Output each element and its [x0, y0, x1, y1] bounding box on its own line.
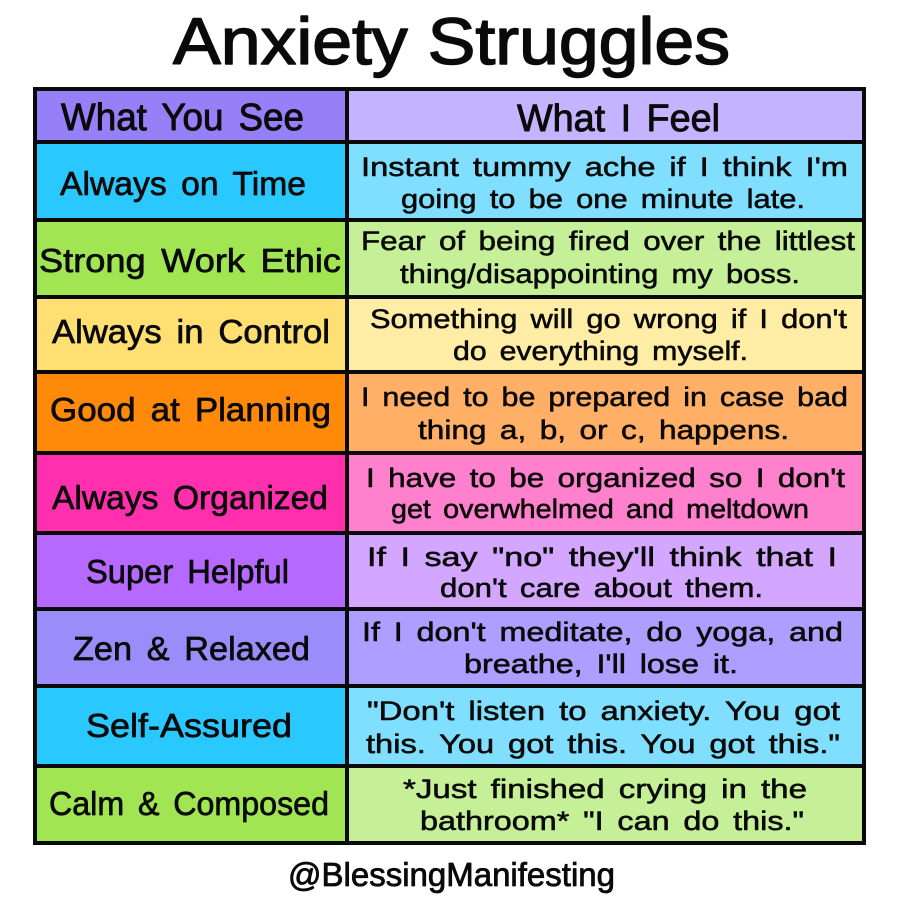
row: good at planning: thing a, b, or c, happens. — [418, 415, 789, 445]
row: always organized — [37, 455, 862, 531]
row: always in control: do everything myself. — [453, 336, 748, 366]
row: strong work ethic — [37, 222, 862, 295]
row: always on time: going to be one minute late. — [401, 184, 805, 214]
row: self-assured: this. You got this. You got this." — [366, 729, 840, 759]
row: always on time: Instant tummy ache if I think I'm — [361, 152, 848, 182]
row: calm and composed: *Just finished crying in the — [403, 774, 807, 804]
row: always in control: Always in Control — [52, 313, 330, 350]
row: calm and composed: bathroom* "I can do this." — [420, 806, 804, 836]
footer handle: @BlessingManifesting — [288, 856, 615, 893]
row: zen and relaxed: breathe, I'll lose it. — [464, 649, 738, 679]
row: always organized: get overwhelmed and meltdown — [391, 494, 809, 524]
row: super helpful — [37, 535, 862, 607]
row: self-assured: Self-Assured — [86, 707, 292, 744]
title: Anxiety Struggles — [173, 4, 730, 78]
row: always on time — [37, 144, 862, 218]
row: strong work ethic: Strong Work Ethic — [39, 242, 341, 279]
row: always on time: Always on Time — [60, 165, 306, 202]
row: calm and composed: Calm & Composed — [49, 785, 329, 822]
table — [33, 87, 866, 845]
row: self-assured — [37, 688, 862, 764]
row: super helpful: don't care about them. — [440, 573, 763, 603]
row: super helpful: If I say "no" they'll think that I — [367, 542, 837, 572]
row: always organized: Always Organized — [52, 479, 328, 516]
row: zen and relaxed — [37, 611, 862, 684]
row: zen and relaxed: Zen & Relaxed — [73, 630, 310, 667]
row: self-assured: "Don't listen to anxiety. You got — [367, 696, 841, 726]
row: always in control — [37, 299, 862, 370]
row: header: What I Feel — [517, 98, 720, 140]
row: good at planning — [37, 374, 862, 451]
row: strong work ethic: thing/disappointing my boss. — [400, 259, 800, 289]
row: zen and relaxed: If I don't meditate, do yoga, and — [362, 617, 843, 647]
row: super helpful: Super Helpful — [86, 553, 289, 590]
row: header: What You See — [61, 97, 304, 139]
row: always in control: Something will go wrong if I don't — [370, 304, 848, 334]
row: calm and composed — [37, 768, 862, 841]
row: strong work ethic: Fear of being fired over the littlest — [361, 226, 856, 256]
row: header — [37, 91, 862, 140]
row: good at planning: Good at Planning — [50, 391, 331, 428]
row: always organized: I have to be organized so I don't — [366, 463, 846, 493]
row: good at planning: I need to be prepared in case bad — [361, 382, 848, 412]
